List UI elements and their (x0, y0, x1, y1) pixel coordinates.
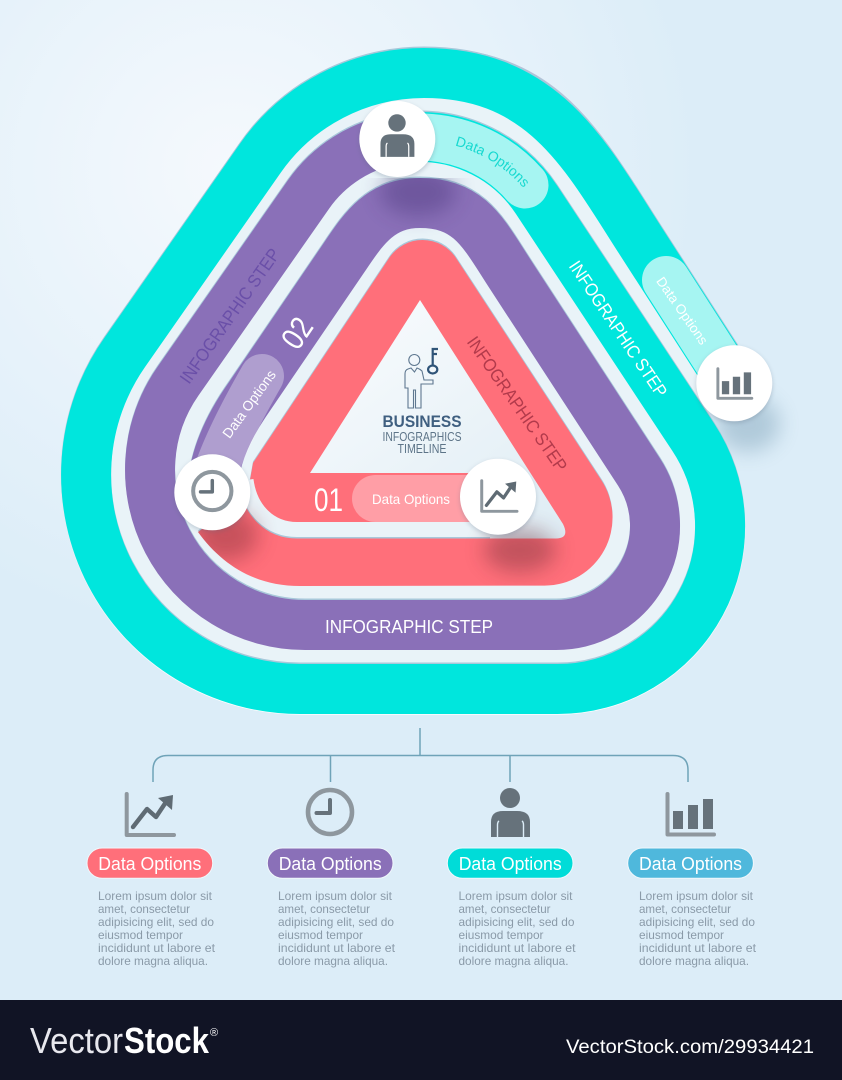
panel: spiral triangle diagram (60, 46, 788, 715)
column 2: time (267, 790, 396, 968)
column 1: growth (87, 794, 216, 968)
badge: data options red (87, 848, 213, 878)
diagram base silhouette (61, 48, 753, 714)
watermark logo: Stock (124, 1020, 210, 1061)
connector tree (153, 728, 688, 782)
icon: businessman holding key (405, 349, 438, 408)
text block: adipisicing elit, sed do (458, 915, 575, 929)
button: bar chart (696, 345, 772, 423)
text block: dolore magna aliqua. (278, 954, 388, 968)
footer bar (0, 1000, 842, 1080)
watermark logo: ® (210, 1027, 218, 1039)
text block: eiusmod tempor (98, 928, 183, 942)
label: teal infographic step: INFOGRAPHIC STEP (565, 257, 671, 401)
title: business: BUSINESS (382, 413, 462, 431)
pill: teal data options right (653, 274, 732, 383)
text block: amet, consectetur (98, 902, 190, 916)
button: clock (174, 454, 250, 532)
label: purple infographic step: INFOGRAPHIC STEP (176, 245, 284, 387)
icon: clock (308, 790, 352, 834)
button: person (359, 101, 435, 179)
text block: incididunt ut labore et (639, 941, 757, 955)
shadow: bar chart button on background (716, 396, 780, 452)
watermark logo: Vector (30, 1020, 123, 1061)
badge: data options blue (628, 848, 753, 878)
pill: purple data options: Data Options (219, 367, 279, 441)
column 3: people (447, 788, 576, 968)
text block: amet, consectetur (278, 902, 370, 916)
badge: data options red: Data Options (98, 854, 201, 874)
shadow: clock button (194, 509, 258, 561)
text block: incididunt ut labore et (458, 941, 576, 955)
pill: teal data options right: Data Options (653, 274, 711, 348)
pill: purple data options (213, 367, 279, 480)
band: purple spiral (150, 138, 655, 625)
text block: incididunt ut labore et (278, 941, 396, 955)
text block: Lorem ipsum dolor sit (458, 889, 573, 903)
badge: data options teal: Data Options (459, 854, 562, 874)
shadow: person button (380, 168, 456, 216)
band: red spiral (198, 238, 613, 586)
badge: data options purple (267, 848, 393, 878)
band: teal spiral (86, 72, 732, 689)
text block: adipisicing elit, sed do (98, 915, 214, 929)
number 01: 01 (314, 482, 343, 518)
text block: incididunt ut labore et (98, 941, 216, 955)
text block: dolore magna aliqua. (458, 954, 568, 968)
text block: Lorem ipsum dolor sit (98, 889, 213, 903)
text block: adipisicing elit, sed do (278, 915, 394, 929)
watermark id: VectorStock.com/29934421 (566, 1036, 814, 1058)
subtitle: infographics: INFOGRAPHICS (382, 430, 462, 444)
text block (278, 889, 396, 968)
pill: teal data options top: Data Options (456, 136, 528, 187)
text block: dolore magna aliqua. (639, 954, 749, 968)
label: bottom infographic step: INFOGRAPHIC STEP (325, 617, 493, 637)
text block: eiusmod tempor (278, 928, 363, 942)
pill: red data options (352, 475, 492, 522)
pill: red data options: Data Options (372, 491, 450, 507)
icon: person (491, 788, 530, 837)
subtitle: timeline: TIMELINE (398, 442, 446, 456)
central triangle (310, 300, 565, 538)
pill: teal data options top (426, 114, 548, 208)
text block: Lorem ipsum dolor sit (639, 889, 754, 903)
watermark logo (30, 1020, 218, 1061)
text block (458, 889, 576, 968)
text block: amet, consectetur (639, 902, 731, 916)
button: line chart (460, 459, 536, 536)
text block (98, 889, 216, 968)
number 02: 02 (274, 310, 320, 356)
text block: eiusmod tempor (639, 928, 724, 942)
text block: adipisicing elit, sed do (639, 915, 755, 929)
label: red infographic step: INFOGRAPHIC STEP (463, 333, 571, 475)
text block (639, 889, 757, 968)
text block: eiusmod tempor (458, 928, 544, 942)
icon: line chart (127, 794, 174, 835)
text block: amet, consectetur (458, 902, 550, 916)
inner light strip under red band (246, 480, 490, 531)
shadow: chart button (484, 528, 556, 572)
icon: bar chart (668, 794, 714, 834)
badge: data options purple: Data Options (279, 854, 382, 874)
text block: Lorem ipsum dolor sit (278, 889, 393, 903)
badge: data options teal (447, 848, 573, 878)
column 4: statistics (628, 794, 757, 968)
badge: data options blue: Data Options (639, 854, 742, 874)
text block: dolore magna aliqua. (98, 954, 208, 968)
